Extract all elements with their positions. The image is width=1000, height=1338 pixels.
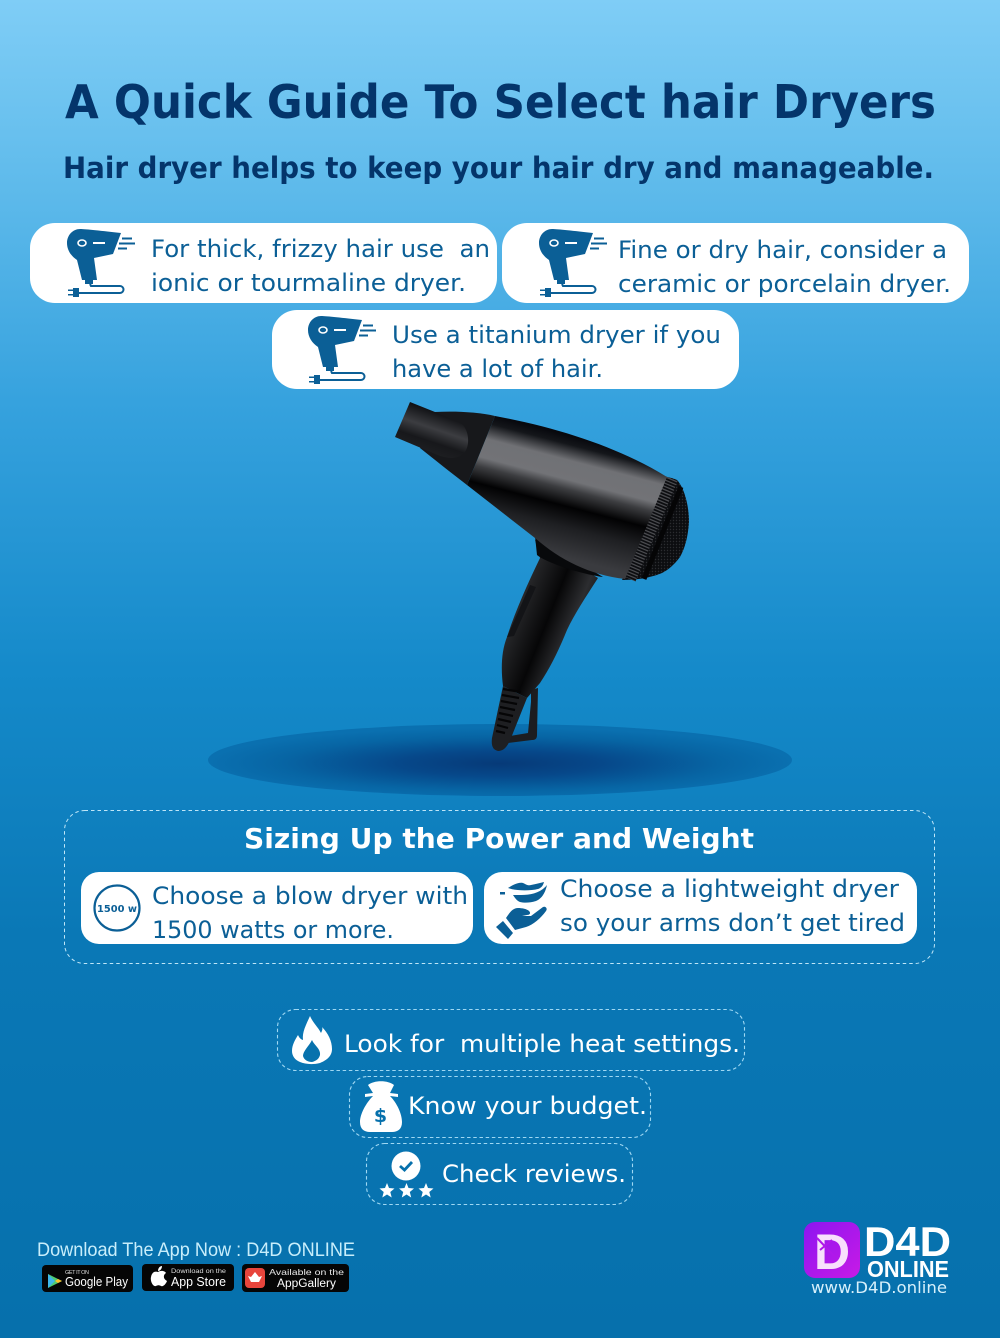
icon: 1500 w badge bbox=[94, 886, 140, 930]
text: budget: Know your budget. bbox=[408, 1092, 647, 1120]
text: weight advice: Choose a lightweight dryer bbox=[560, 875, 899, 903]
stand loop bbox=[508, 688, 538, 743]
text: fine hair advice: ceramic or porcelain dryer. bbox=[618, 270, 951, 298]
grip bbox=[492, 686, 527, 751]
rear vent ring bbox=[630, 479, 672, 579]
text: titanium advice: Use a titanium dryer if you bbox=[392, 321, 721, 349]
logo wordmark: D4D bbox=[864, 1218, 951, 1265]
callout: heat settings bbox=[278, 1010, 744, 1070]
text: reviews: Check reviews. bbox=[442, 1160, 626, 1188]
panel: power and weight bbox=[64, 810, 934, 964]
icon: check badge and stars bbox=[380, 1152, 434, 1198]
download prompt: Download The App Now : D4D ONLINE bbox=[37, 1239, 355, 1261]
icon: money bag: $ bbox=[374, 1105, 387, 1127]
panel: fine or dry hair tip bbox=[502, 223, 969, 303]
heading: sizing up: Sizing Up the Power and Weight bbox=[244, 822, 754, 855]
illustration: black hair dryer bbox=[395, 402, 689, 751]
badge: AppGallery: AppGallery bbox=[277, 1278, 336, 1290]
badge: AppGallery: Available on the bbox=[269, 1267, 344, 1277]
panel: titanium dryer tip bbox=[272, 310, 739, 389]
floor shadow bbox=[208, 724, 792, 796]
badge: Google Play: Google Play bbox=[65, 1275, 129, 1289]
callout: reviews bbox=[366, 1144, 632, 1204]
icon: small hair dryer bbox=[308, 316, 376, 384]
neck bbox=[535, 536, 603, 577]
text: heat settings: Look for multiple heat settings. bbox=[344, 1030, 740, 1058]
badge: Google Play: GET IT ON bbox=[65, 1270, 89, 1276]
text: fine hair advice: Fine or dry hair, consider a bbox=[618, 236, 947, 264]
text: titanium advice bbox=[392, 321, 721, 383]
panel: thick frizzy hair tip bbox=[30, 223, 497, 303]
subtitle: Hair dryer helps to keep your hair dry and manageable. bbox=[63, 151, 934, 185]
text: fine hair advice bbox=[618, 236, 951, 298]
rear band bbox=[644, 487, 681, 579]
badge: AppGallery bbox=[242, 1264, 349, 1292]
badge: Google Play bbox=[42, 1265, 133, 1292]
logo: D4D Online bbox=[804, 1218, 951, 1297]
title: A Quick Guide To Select hair Dryers bbox=[65, 75, 936, 129]
text: wattage advice bbox=[152, 882, 468, 944]
text: thick hair advice bbox=[151, 235, 490, 297]
icon: money bag bbox=[360, 1081, 402, 1132]
icon: 1500 w badge: 1500 w bbox=[97, 904, 137, 915]
text: wattage advice: 1500 watts or more. bbox=[152, 916, 394, 944]
nozzle bbox=[395, 402, 468, 458]
text: thick hair advice: For thick, frizzy hair use an bbox=[151, 235, 490, 263]
rear cap mesh bbox=[622, 477, 689, 580]
icon: small hair dryer bbox=[539, 229, 607, 297]
logo mark bbox=[804, 1222, 860, 1280]
badge: App Store: App Store bbox=[171, 1274, 226, 1289]
text: weight advice bbox=[560, 875, 905, 937]
logo mark: D bbox=[814, 1224, 850, 1280]
text: thick hair advice: ionic or tourmaline dryer. bbox=[151, 269, 466, 297]
card: wattage bbox=[81, 872, 473, 944]
icon: feather over hand bbox=[496, 882, 547, 939]
text: titanium advice: have a lot of hair. bbox=[392, 355, 603, 383]
barrel bbox=[467, 416, 667, 579]
card: weight bbox=[484, 872, 917, 944]
badge: App Store bbox=[142, 1264, 234, 1291]
text: wattage advice: Choose a blow dryer with bbox=[152, 882, 468, 910]
icon: flame bbox=[292, 1016, 332, 1064]
handle buttons bbox=[507, 585, 536, 637]
nose bbox=[420, 412, 495, 485]
handle bbox=[502, 540, 598, 698]
website: www.D4D.online bbox=[811, 1278, 947, 1297]
icon: small hair dryer bbox=[67, 229, 135, 297]
logo: D4D Online: ONLINE bbox=[867, 1256, 949, 1282]
text: weight advice: so your arms don’t get tired bbox=[560, 909, 905, 937]
badge: App Store: Download on the bbox=[171, 1269, 227, 1275]
callout: budget bbox=[350, 1076, 650, 1138]
